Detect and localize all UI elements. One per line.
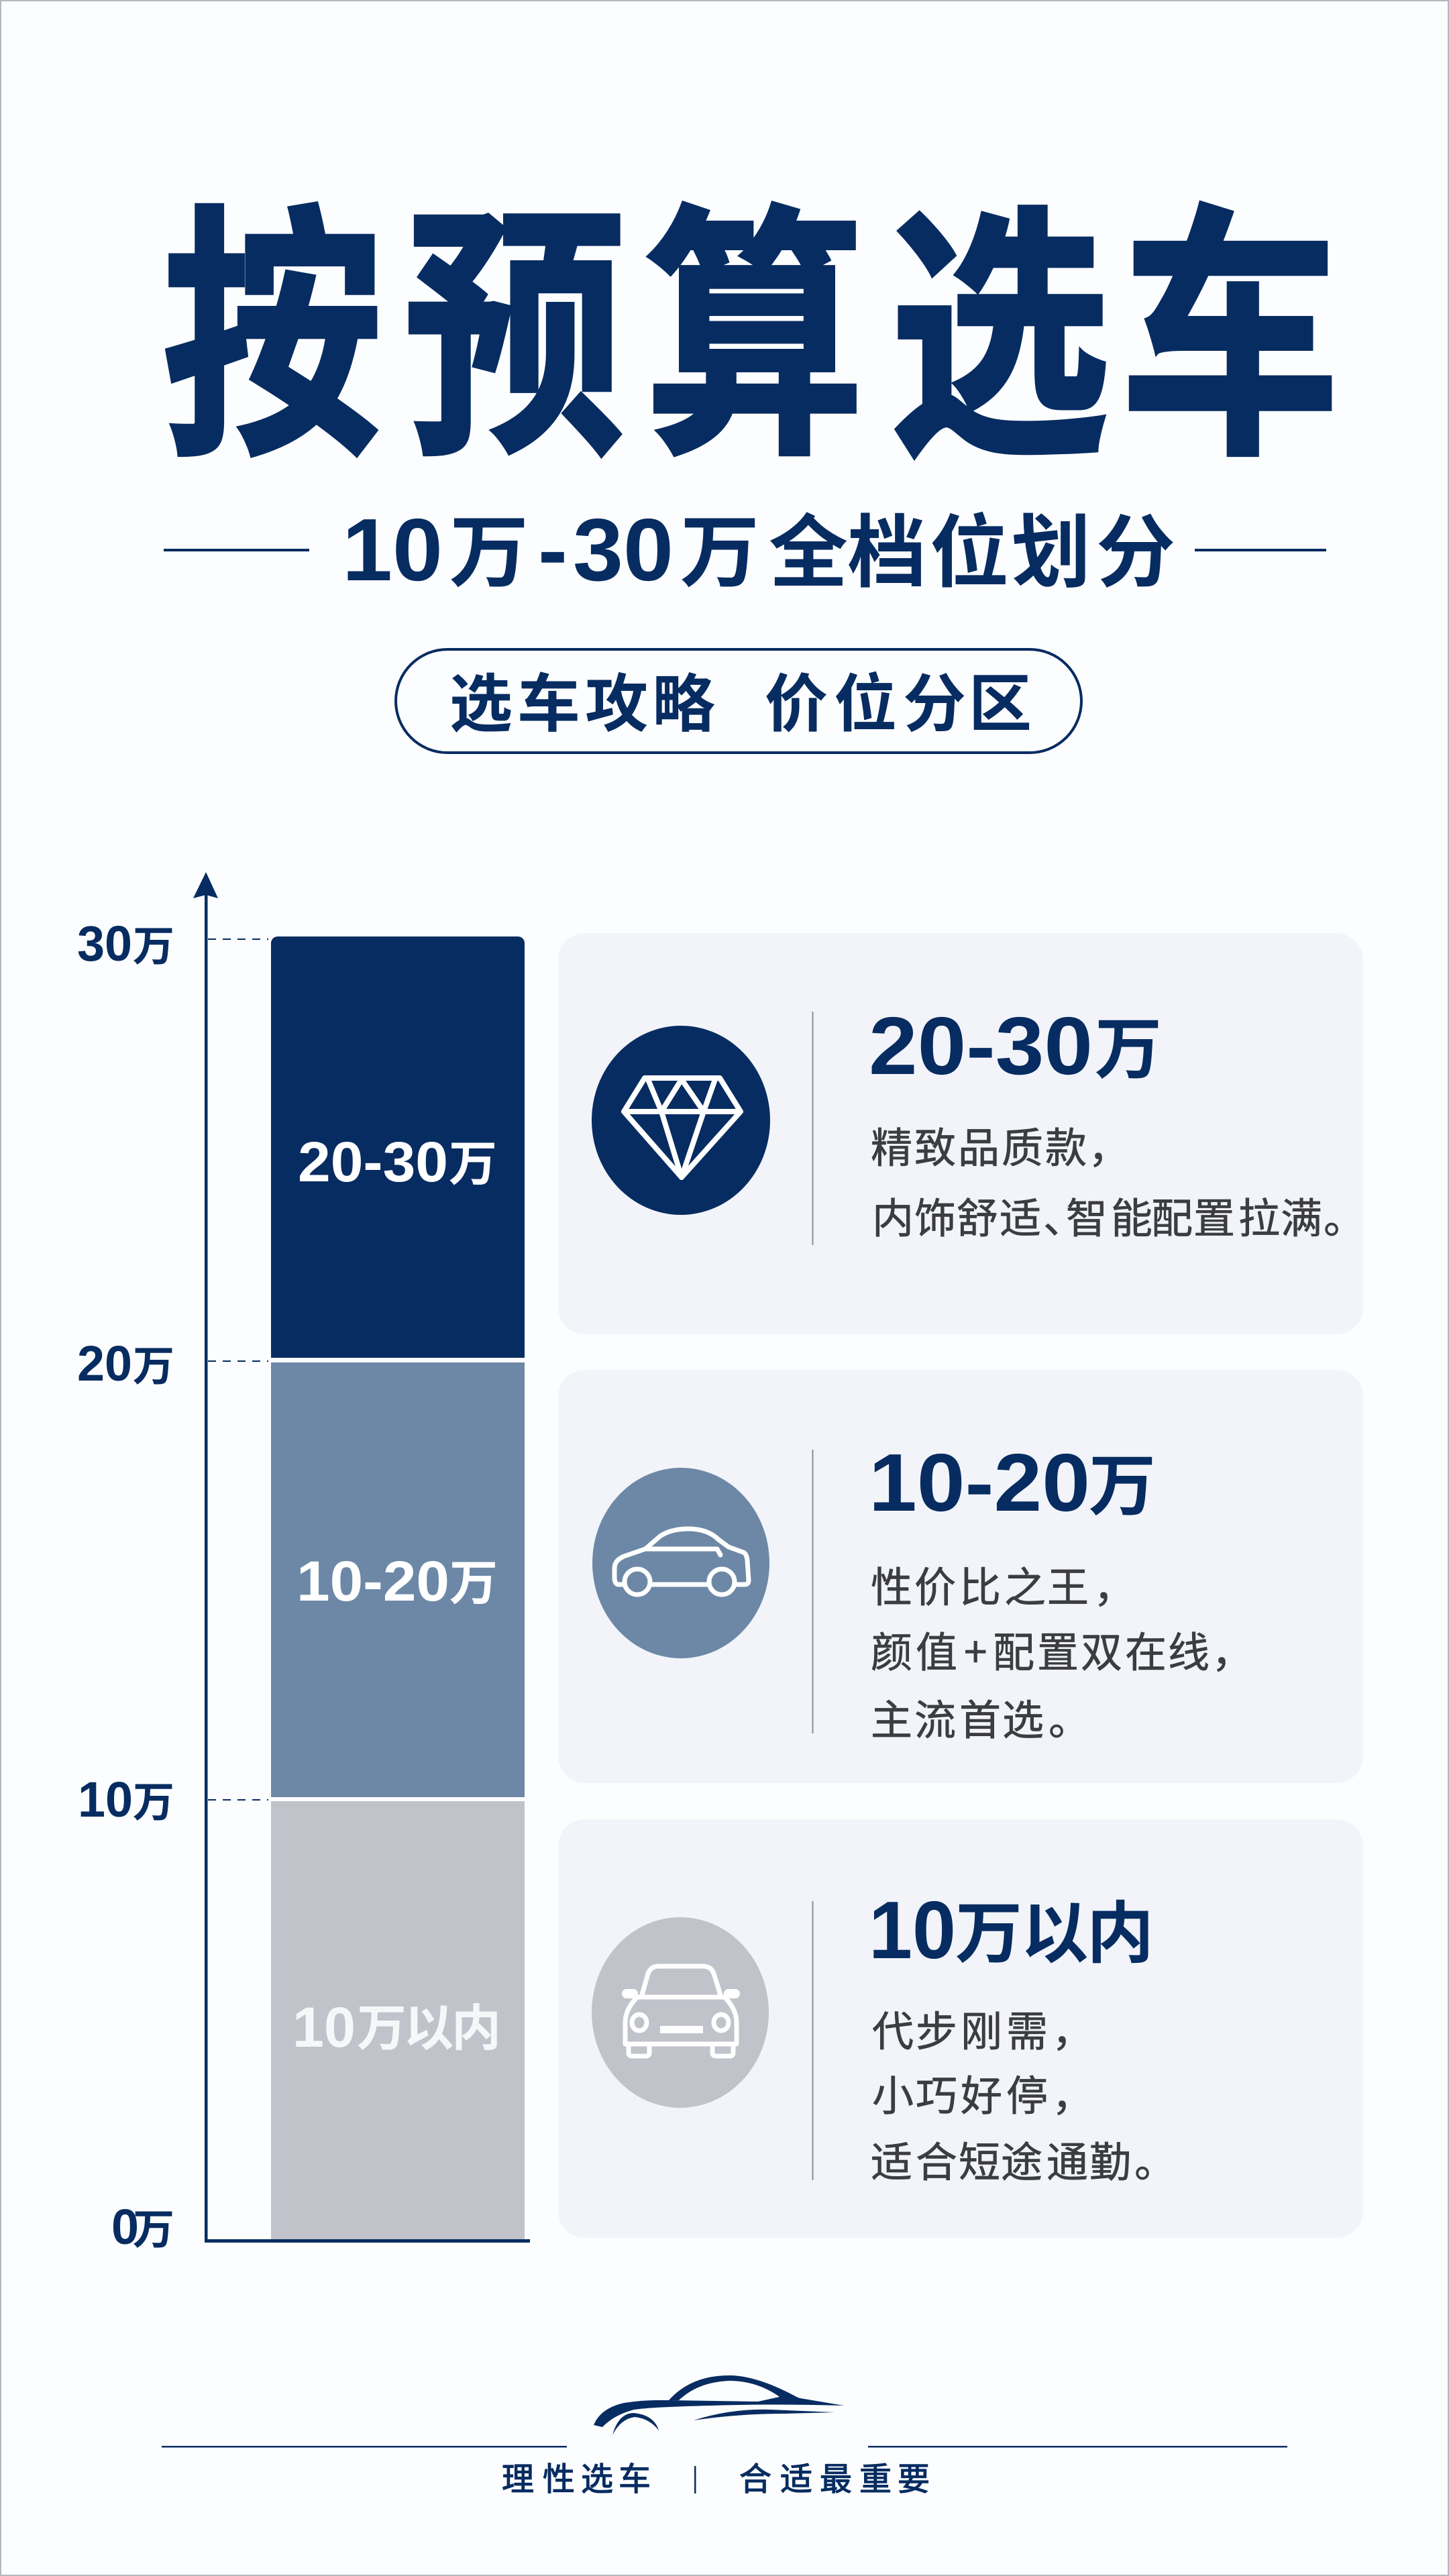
description xyxy=(871,1998,1176,2189)
description xyxy=(871,1554,1253,1747)
axis labels: 30 xyxy=(77,916,132,971)
tick guides xyxy=(208,939,268,1800)
subtitle with side rules: 全档位划分 xyxy=(769,488,1175,603)
axis labels: 0 xyxy=(111,2199,139,2255)
heading: 万 xyxy=(1095,995,1162,1092)
panel: 10万以内 xyxy=(558,1819,1363,2238)
icon: side car xyxy=(592,1468,769,1658)
subtitle with side rules: 30 xyxy=(573,500,674,599)
subtitle with side rules xyxy=(164,488,1326,603)
description: 小巧好停， xyxy=(872,2062,1093,2123)
heading: 20-30 xyxy=(869,1000,1093,1091)
heading: 万以内 xyxy=(955,1879,1154,1976)
axis labels xyxy=(77,912,174,2256)
description: 颜值+配置双在线， xyxy=(871,1619,1253,1679)
stacked bar: 20-30万 xyxy=(271,936,525,1358)
stacked bar: 10万以内: 10 xyxy=(292,1996,356,2059)
description: 性价比之王， xyxy=(871,1554,1135,1614)
description: 适合短途通勤。 xyxy=(871,2129,1176,2189)
description: 主流首选。 xyxy=(871,1686,1090,1747)
heading xyxy=(869,1879,1154,1976)
subtitle with side rules: 万 xyxy=(449,488,529,603)
title: 按预算选车 xyxy=(162,123,1340,507)
subtitle with side rules: - xyxy=(538,500,568,599)
axis labels: 万 xyxy=(133,1332,174,1393)
footer tagline: 理性选车合适最重要 xyxy=(502,2453,930,2500)
stacked bar: 10万以内 xyxy=(271,1801,525,2239)
icon: front car xyxy=(592,1917,769,2108)
subtitle with side rules: 万 xyxy=(680,488,759,603)
axis labels: 10 xyxy=(78,1772,133,1827)
heading: 万 xyxy=(1089,1432,1156,1529)
footer logo: car silhouette xyxy=(594,2375,844,2435)
axis labels: 万 xyxy=(133,912,174,973)
heading xyxy=(869,995,1162,1092)
panel: 20-30万 xyxy=(558,933,1365,1334)
axis labels: 万 xyxy=(133,2196,174,2256)
description: 精致品质款， xyxy=(871,1114,1130,1175)
description: 内饰舒适、智能配置拉满。 xyxy=(872,1185,1365,1245)
pill tag: 选车攻略价位分区 xyxy=(449,653,1032,745)
axis labels: 万 xyxy=(133,1768,174,1829)
stacked bar: 10-20万: 10-20 xyxy=(297,1550,449,1613)
panel: 10-20万 xyxy=(558,1370,1363,1783)
stacked bar: 10-20万: 万 xyxy=(449,1544,498,1614)
stacked bar: 20-30万: 20-30 xyxy=(298,1130,448,1193)
axis xyxy=(193,872,530,2243)
heading: 10 xyxy=(869,1884,956,1976)
heading xyxy=(869,1432,1156,1529)
heading: 10-20 xyxy=(869,1437,1090,1528)
stacked bar: 10-20万 xyxy=(271,1362,525,1797)
axis labels: 20 xyxy=(77,1336,132,1391)
icon: diamond xyxy=(592,1026,770,1215)
description: 代步刚需， xyxy=(872,1998,1093,2058)
footer rules xyxy=(162,2446,1287,2447)
stacked bar: 10万以内: 万以内 xyxy=(357,1988,501,2060)
subtitle with side rules: 10 xyxy=(342,500,443,599)
stacked bar: 20-30万: 万 xyxy=(449,1124,497,1195)
description xyxy=(871,1114,1365,1245)
arrowhead xyxy=(193,872,218,898)
